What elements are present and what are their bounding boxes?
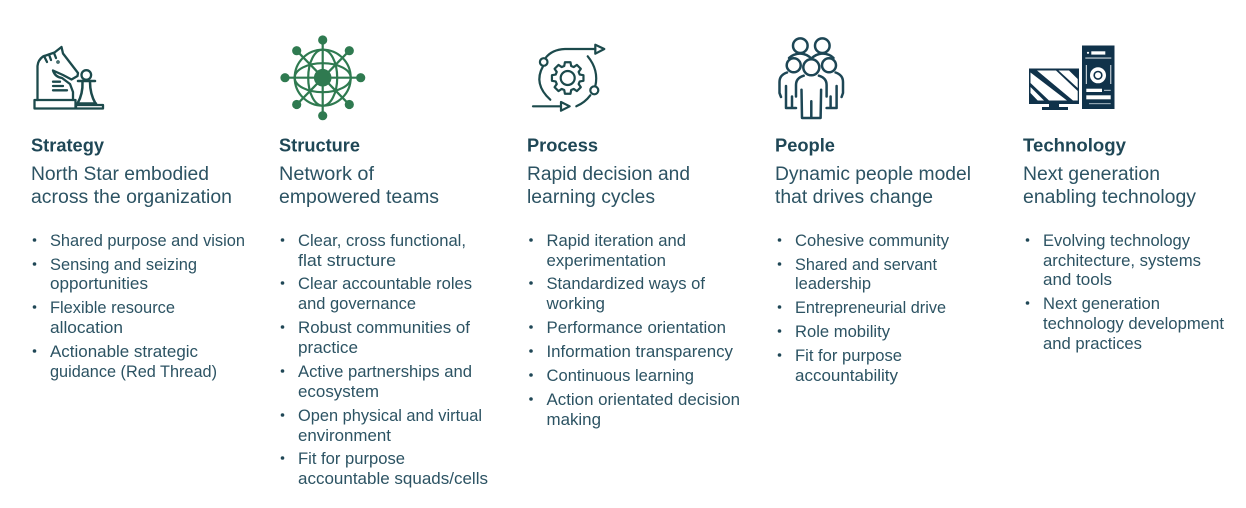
bullet list: strategy: Actionable strategic (50, 343, 198, 361)
panel: people (775, 38, 971, 385)
subtitle: process: Rapid decision and (527, 164, 690, 185)
bullet list: process: Rapid iteration and (546, 232, 686, 250)
panel: strategy (31, 47, 245, 381)
bullet list: process: Continuous learning (546, 367, 694, 385)
bullet list: structure: Robust communities of (298, 319, 470, 337)
subtitle: process (527, 164, 690, 208)
subtitle: structure: Network of (279, 164, 375, 185)
bullet list: technology: Next generation (1043, 295, 1160, 313)
bullet list: strategy: allocation (50, 319, 123, 337)
bullet list: people (778, 232, 950, 385)
panel: structure (279, 35, 488, 488)
bullet list: structure: Active partnerships and (298, 363, 472, 381)
heading: Process: Process (527, 136, 598, 156)
subtitle: people (775, 164, 971, 208)
bullet list: strategy: Sensing and seizing (50, 256, 197, 274)
bullet list: technology: Evolving technology (1043, 232, 1191, 250)
bullet list: people: accountability (795, 367, 899, 385)
bullet list: strategy: opportunities (50, 275, 148, 293)
bullet list: process: making (546, 411, 601, 429)
heading: Technology: Technology (1023, 136, 1126, 156)
subtitle: strategy (31, 164, 232, 208)
subtitle: structure: empowered teams (279, 187, 439, 208)
subtitle: structure (279, 164, 439, 208)
bullet list: technology: architecture, systems (1043, 252, 1201, 270)
icon: network globe (280, 35, 365, 120)
bullet list: structure: Open physical and virtual (298, 407, 482, 425)
panel: technology (1023, 46, 1224, 353)
bullet list: process: Action orientated decision (546, 391, 740, 409)
bullet list: process (529, 232, 740, 429)
bullet list: process: experimentation (546, 252, 666, 270)
bullet list: people: leadership (795, 275, 871, 293)
heading: Strategy: Strategy (31, 136, 104, 156)
bullet list: structure: Clear, cross functional, (298, 232, 466, 250)
bullet list: technology: and practices (1043, 335, 1142, 353)
bullet list: structure: Fit for purpose (298, 450, 405, 468)
bullet list: process: Performance orientation (546, 319, 726, 337)
bullet list: process: working (545, 295, 605, 313)
bullet list: process: Information transparency (546, 343, 734, 361)
subtitle: process: learning cycles (527, 187, 655, 208)
bullet list: people: Shared and servant (795, 256, 937, 274)
heading: Structure: Structure (279, 136, 360, 156)
bullet list: structure: and governance (298, 295, 416, 313)
bullet list: people: Entrepreneurial drive (795, 299, 946, 317)
bullet list: structure (281, 232, 488, 488)
bullet list: technology: and tools (1043, 271, 1112, 289)
subtitle: technology: enabling technology (1023, 187, 1197, 208)
icon: group of people (780, 38, 843, 118)
subtitle: strategy: North Star embodied (31, 164, 209, 185)
bullet list: strategy: guidance (Red Thread) (50, 363, 217, 381)
bullet list: structure: ecosystem (298, 383, 379, 401)
subtitle: people: that drives change (775, 187, 933, 208)
bullet list: process: Standardized ways of (546, 275, 705, 293)
icon: gear with cycle arrows (533, 45, 604, 111)
bullet list: structure: environment (298, 427, 391, 445)
bullet list: structure: practice (298, 339, 358, 357)
subtitle: technology: Next generation (1023, 164, 1160, 185)
subtitle: strategy: across the organization (31, 187, 232, 208)
panel: process (527, 45, 740, 429)
bullet list: strategy (33, 232, 245, 381)
bullet list: structure: flat structure (298, 252, 396, 270)
bullet list: people: Cohesive community (795, 232, 950, 250)
bullet list: technology: technology development (1043, 315, 1224, 333)
bullet list: structure: accountable squads/cells (298, 470, 488, 488)
bullet list: structure: Clear accountable roles (298, 275, 472, 293)
icon: monitor and computer tower (1029, 46, 1114, 110)
icon: chess knight and pawn (34, 47, 103, 108)
subtitle: technology (1023, 164, 1197, 208)
bullet list: strategy: Shared purpose and vision (50, 232, 245, 250)
bullet list: people: Role mobility (795, 323, 891, 341)
bullet list: strategy: Flexible resource (50, 299, 175, 317)
bullet list: technology (1026, 232, 1224, 353)
heading: People: People (775, 136, 835, 156)
subtitle: people: Dynamic people model (775, 164, 971, 185)
bullet list: people: Fit for purpose (795, 347, 902, 365)
